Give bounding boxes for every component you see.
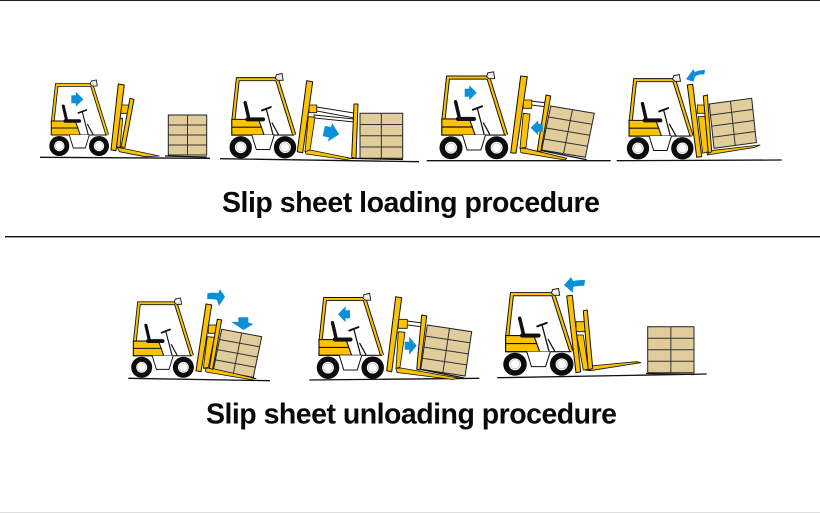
ground line xyxy=(40,157,210,158)
forklift mast and forks xyxy=(567,295,641,373)
ground line xyxy=(617,159,782,162)
arrow: tilt back xyxy=(564,277,585,293)
forklift body xyxy=(131,298,194,378)
forklift body xyxy=(627,75,694,159)
panel: unloading step 2 xyxy=(309,293,479,380)
arrow: forward xyxy=(322,122,341,143)
forklift mast and forks xyxy=(111,84,159,157)
forklift body xyxy=(440,72,508,159)
slip sheet xyxy=(352,158,403,160)
panel: loading step 2 xyxy=(220,74,419,162)
forklift mast and forks xyxy=(687,84,760,157)
ground line xyxy=(309,378,479,380)
tilted load xyxy=(421,325,472,376)
forklift body xyxy=(49,80,109,156)
ground line xyxy=(220,159,419,162)
arrow: forward xyxy=(405,337,417,355)
panel: unloading step 1 xyxy=(128,289,270,381)
forklift mast, push-pull and forks xyxy=(387,297,464,380)
heading: loading: Slip sheet loading procedure xyxy=(222,187,600,219)
panel: loading step 3 xyxy=(427,72,611,161)
arrow: backward xyxy=(338,306,350,322)
bottom border line xyxy=(0,512,820,513)
ground line xyxy=(497,374,707,378)
tilted load xyxy=(709,98,756,148)
tilted load xyxy=(542,106,594,157)
top border line xyxy=(0,0,820,1)
arrow: forward xyxy=(465,85,477,100)
tilted load xyxy=(213,329,262,377)
pallet load xyxy=(648,327,694,373)
slip sheet xyxy=(165,156,207,157)
forklift mast, push-pull and forks xyxy=(297,81,358,160)
forklift body xyxy=(230,74,296,158)
divider line xyxy=(5,236,820,237)
pallet load xyxy=(168,115,207,155)
ground line xyxy=(427,160,611,162)
heading: unloading: Slip sheet unloading procedure xyxy=(206,398,617,430)
pallet slip sheet xyxy=(646,374,694,375)
forklift mast and forks xyxy=(196,304,256,380)
arrow: down xyxy=(231,317,253,330)
arrow: forward xyxy=(71,92,83,107)
ground line xyxy=(128,378,270,381)
arrow: tilt forward xyxy=(207,289,225,306)
pallet load xyxy=(360,113,403,158)
forklift body xyxy=(503,288,573,376)
forklift body xyxy=(317,293,384,379)
panel: unloading step 3 xyxy=(497,277,707,378)
panel: loading step 4 xyxy=(617,69,782,161)
arrow: backward xyxy=(531,120,543,135)
panel: loading step 1 xyxy=(40,80,210,158)
forklift mast, push-pull and forks xyxy=(511,76,587,160)
arrow: tilt back xyxy=(686,69,705,82)
